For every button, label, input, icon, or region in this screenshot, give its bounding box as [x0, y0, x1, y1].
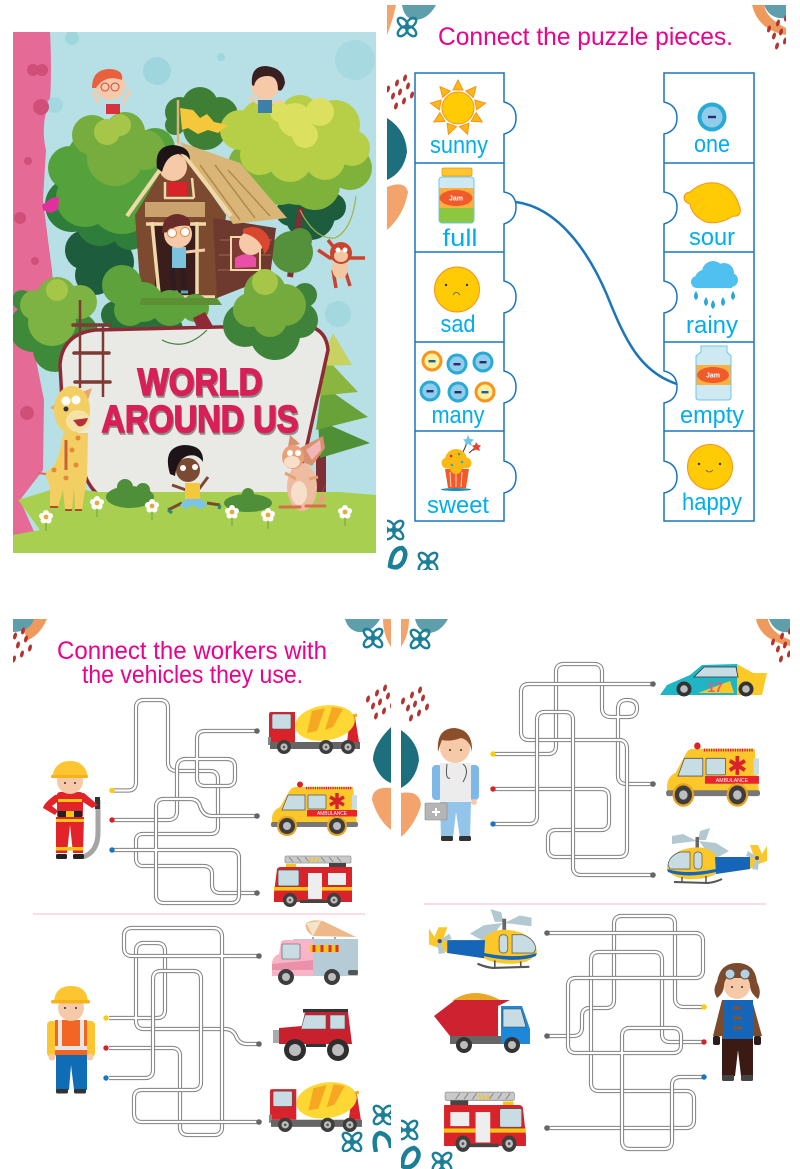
right tree trunk: [290, 208, 301, 277]
vehicle: dump truck: [434, 993, 530, 1053]
panel: book cover: [9, 31, 376, 553]
right puzzle column: [664, 73, 754, 521]
word: rainy: rainy: [686, 312, 738, 339]
book title: [101, 368, 299, 436]
gable trim: [127, 146, 231, 216]
pilot: [713, 963, 762, 1081]
roof window frame: [164, 178, 194, 198]
bushes on ground: [106, 479, 272, 512]
icon: full jam jar: Jam: [449, 196, 463, 202]
divider: [424, 903, 766, 905]
icon: sun: [430, 80, 486, 136]
divider: [33, 913, 365, 915]
decorative blobs: [397, 619, 800, 1169]
panel: workers and vehicles right page: [397, 619, 800, 1169]
kangaroo: [280, 435, 330, 511]
green tree behind house: [271, 228, 313, 273]
icon: many buttons: [420, 350, 496, 402]
firefighter: [43, 761, 100, 859]
daisies: [39, 496, 352, 531]
icon: empty jam jar: Jam: [706, 372, 720, 380]
vehicle: race car: 17: [707, 679, 723, 695]
maze: construction worker: [103, 928, 262, 1135]
kid: roof window: [159, 153, 187, 181]
heading: Connect the workers with: [57, 637, 327, 665]
word: sweet: sweet: [427, 492, 489, 519]
word: sour: sour: [689, 224, 735, 251]
giraffe: [38, 386, 92, 510]
doctor: [425, 728, 479, 841]
ladder: [73, 300, 110, 397]
book title: WORLD: [138, 362, 262, 404]
icon: full jam jar: [439, 168, 474, 223]
maze: firefighter: [109, 700, 260, 903]
word: sunny: sunny: [430, 132, 488, 159]
house walls: [135, 145, 226, 298]
vehicle: fire truck flipped: [444, 1092, 526, 1152]
icon: sad face: [434, 267, 480, 312]
heading: the vehicles they use.: [82, 661, 303, 689]
vehicle: red jeep: [273, 1009, 352, 1061]
word: sad: sad: [440, 311, 476, 338]
vehicle: ambulance second: [666, 742, 760, 807]
word: happy: happy: [682, 489, 742, 516]
pine tree: [316, 333, 370, 500]
word: one: one: [694, 131, 730, 158]
heading: [57, 637, 327, 689]
sign plank: [145, 202, 205, 217]
bush under house: [101, 265, 222, 328]
vehicle: race car: [660, 664, 767, 696]
icon: one button: [698, 102, 726, 132]
vehicle: ice cream truck: [272, 920, 358, 985]
lower left tree: [9, 277, 98, 372]
icon: lemon: [684, 183, 740, 223]
heading: Connect the puzzle pieces.: [438, 23, 733, 51]
back tree: [165, 87, 238, 150]
tree house: [127, 142, 287, 298]
book title: AROUND US: [102, 401, 300, 443]
book title: AROUND US: [102, 399, 298, 441]
sky patterns: [14, 31, 375, 420]
sky background: [13, 32, 376, 553]
icon: rain cloud: [691, 261, 738, 309]
pink tree trunk strip: [13, 32, 54, 553]
butterfly: [42, 197, 59, 213]
right big tree: [220, 95, 372, 210]
icon: cupcake: [441, 435, 481, 491]
kid: side window: [235, 254, 256, 268]
hanging vine: [162, 330, 207, 344]
maze: doctor: [490, 664, 656, 878]
word: full: full: [442, 225, 478, 252]
ground: [13, 487, 376, 553]
vehicle: helicopter flipped: [429, 909, 537, 968]
vehicle: cement mixer: [268, 701, 360, 754]
word: empty: empty: [680, 402, 744, 429]
sign board: [60, 325, 328, 501]
decorative blobs: [3, 619, 395, 1153]
dark back foliage: [65, 190, 346, 295]
kid: curly dark hair: [249, 66, 285, 113]
maze: pilot: [544, 916, 707, 1149]
construction worker: [47, 986, 95, 1094]
kid: red hair with glasses: [92, 69, 130, 114]
vine and monkey: [300, 196, 365, 288]
panel: workers and vehicles left page: [3, 619, 395, 1153]
book title: WORLD: [138, 364, 264, 406]
boy in centre: [168, 445, 220, 513]
flagpole and flag: [178, 100, 228, 145]
thatched roof: [180, 142, 287, 224]
left puzzle column: [415, 73, 516, 521]
word: many: many: [432, 402, 484, 429]
vehicle: helicopter: [667, 828, 767, 883]
connecting line: [516, 202, 677, 384]
right tree foliage: [223, 269, 318, 360]
kid: doorway: [162, 214, 205, 292]
side window: [231, 237, 260, 270]
vehicle: fire truck: [274, 856, 352, 907]
left main tree: [45, 112, 175, 250]
icon: empty jam jar: [696, 346, 731, 400]
decorative blobs: [383, 5, 796, 573]
panel: connect the puzzle pieces: [383, 5, 796, 573]
vehicle: ambulance: [271, 782, 358, 836]
vehicle: cement mixer second: [269, 1078, 362, 1132]
icon: happy face: [688, 444, 732, 490]
door opening: [155, 226, 198, 295]
